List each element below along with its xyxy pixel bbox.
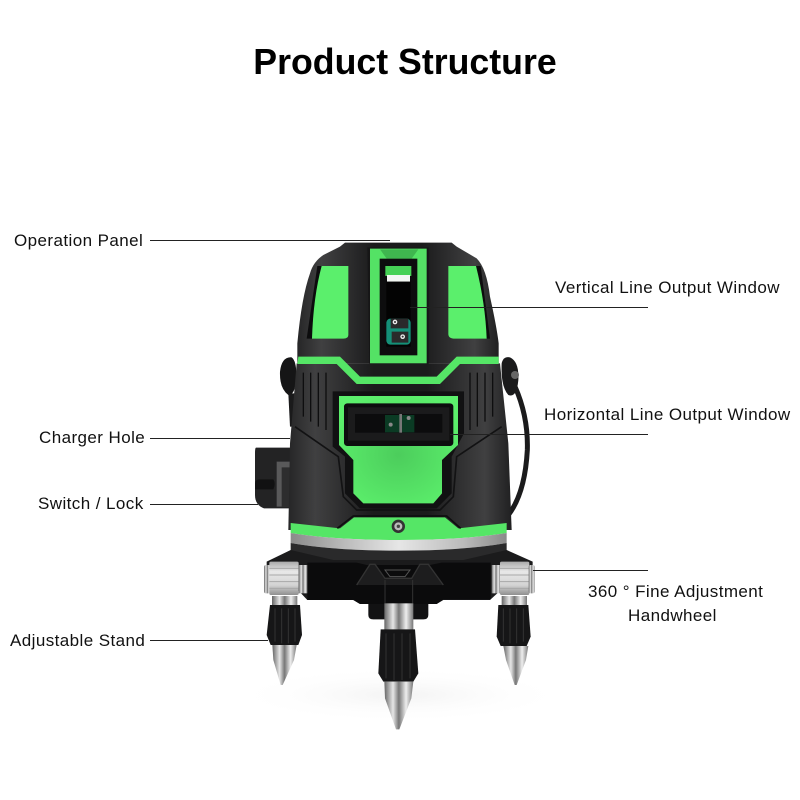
label: 360 fine adjustment handwheel: Handwheel xyxy=(628,606,717,625)
laser level product illustration xyxy=(230,243,570,729)
horizontal line output window xyxy=(333,391,464,508)
right foot xyxy=(497,596,531,685)
side strap lugs and cable xyxy=(280,357,527,515)
label: adjustable stand: Adjustable Stand xyxy=(10,631,145,650)
base ring and tripod xyxy=(264,516,535,729)
floor shadow xyxy=(230,667,570,723)
label: switch / lock: Switch / Lock xyxy=(38,494,144,513)
green lower band xyxy=(291,517,507,540)
fine adjustment handwheels xyxy=(264,562,535,595)
label: vertical line output window: Vertical Line Output Window xyxy=(555,278,780,297)
green band xyxy=(297,357,499,384)
title: Product Structure xyxy=(253,42,557,82)
upper housing xyxy=(297,243,499,364)
left and right green side panels xyxy=(307,266,322,339)
vertical line output window xyxy=(367,247,429,364)
label: operation panel: Operation Panel xyxy=(14,231,143,250)
label: charger hole: Charger Hole xyxy=(39,428,145,447)
charger hole and switch block xyxy=(255,448,292,508)
label: 360 fine adjustment handwheel: 360 ° Fine Adjustment xyxy=(588,582,763,601)
center foot xyxy=(378,603,418,729)
grip ribs xyxy=(303,373,493,430)
silver ring xyxy=(291,533,507,551)
left foot xyxy=(267,596,302,685)
lower housing xyxy=(288,357,512,530)
label: horizontal line output window: Horizontal Line Output Window xyxy=(544,405,791,424)
base plate xyxy=(291,543,507,564)
leader lines xyxy=(150,240,648,640)
